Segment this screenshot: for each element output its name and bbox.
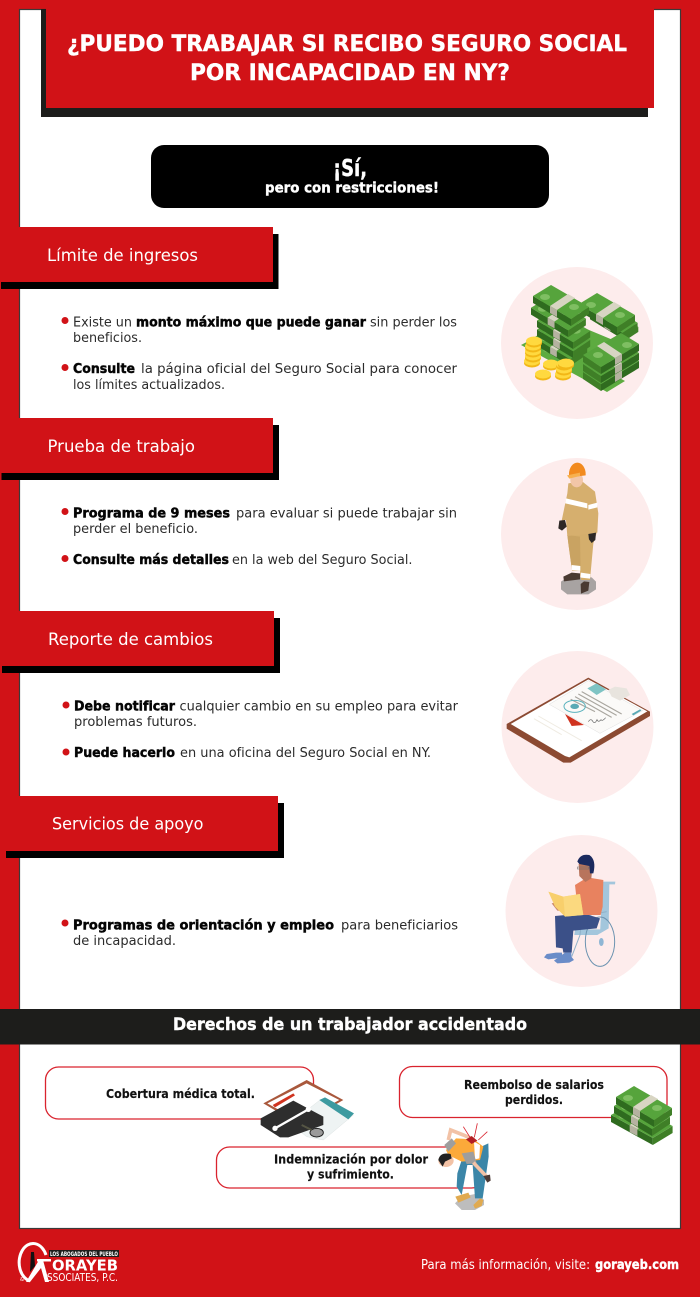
callout: Indemnización por dolor y sufrimiento: Indemnización por dolor	[274, 1152, 429, 1166]
logo: Gorayeb & Associates: &	[20, 1277, 24, 1283]
left stack	[534, 327, 587, 366]
text block: Límite de ingresos: Existe un	[73, 316, 132, 330]
text block: Prueba de trabajo: para evaluar si puede trabajar sin	[236, 506, 457, 522]
heading: Reporte de cambios	[2, 611, 280, 673]
logo: Gorayeb & Associates: LOS ABOGADOS DEL PUEBLO	[50, 1251, 118, 1258]
footer link text: Para más información, visite:	[421, 1258, 590, 1273]
icon: worker with back pain	[438, 1123, 491, 1210]
text block: Prueba de trabajo	[62, 506, 457, 568]
text block: Servicios de apoyo	[62, 918, 458, 949]
title text: ¿PUEDO TRABAJAR SI RECIBO SEGURO SOCIAL	[67, 32, 627, 57]
title banner	[41, 0, 654, 117]
callout: Reembolso de salarios perdidos: perdidos.	[505, 1092, 563, 1107]
heading: Servicios de apoyo	[6, 796, 284, 858]
text block: Reporte de cambios: problemas futuros.	[74, 715, 197, 730]
callout: Reembolso de salarios perdidos	[400, 1066, 673, 1145]
heading: Límite de ingresos	[0, 227, 278, 289]
text block: Reporte de cambios: Puede hacerlo	[74, 746, 175, 761]
callout: Cobertura médica total: Cobertura médica total.	[106, 1086, 255, 1101]
footer link text: gorayeb.com	[595, 1258, 679, 1273]
logo: Gorayeb & Associates	[19, 1243, 119, 1284]
icon: medical documents and x-ray	[261, 1080, 354, 1140]
answer pill: ¡Sí,	[333, 156, 367, 182]
callout: Indemnización por dolor y sufrimiento: y sufrimiento.	[307, 1166, 394, 1182]
text block: Prueba de trabajo: perder el beneficio.	[73, 522, 198, 537]
icon: money stack in circle	[501, 267, 653, 419]
back right bundle	[598, 311, 638, 341]
text block: Límite de ingresos: la página oficial del Seguro Social para conocer	[141, 362, 458, 377]
section bar: Derechos de un trabajador accidentado	[0, 1009, 700, 1044]
text block: Servicios de apoyo: Programas de orientación y empleo	[73, 918, 334, 934]
text block: Límite de ingresos: Consulte	[73, 362, 135, 377]
text block: Reporte de cambios	[62, 700, 459, 761]
text block: Límite de ingresos	[62, 316, 458, 393]
heading: Reporte de cambios: Reporte de cambios	[48, 630, 213, 650]
text block: Reporte de cambios: Debe notificar	[74, 700, 176, 714]
title text: POR INCAPACIDAD EN NY?	[190, 61, 510, 86]
text block: Prueba de trabajo: en la web del Seguro Social.	[232, 553, 412, 568]
callout: Indemnización por dolor y sufrimiento	[216, 1123, 491, 1210]
logo: Gorayeb & Associates: SSOCIATES, P.C.	[47, 1272, 118, 1284]
text block: Servicios de apoyo: para beneficiarios	[341, 918, 458, 934]
icon: person in wheelchair in circle	[506, 835, 658, 987]
heading: Servicios de apoyo: Servicios de apoyo	[52, 814, 204, 834]
text block: Reporte de cambios: en una oficina del Seguro Social en NY.	[180, 746, 431, 761]
text block: Reporte de cambios: cualquier cambio en su empleo para evitar	[180, 700, 459, 714]
heading: Prueba de trabajo	[1, 418, 279, 480]
flat bills	[521, 335, 625, 392]
callout: Reembolso de salarios perdidos: Reembolso de salarios	[464, 1077, 604, 1092]
icon: clipboard in circle	[502, 651, 654, 803]
callout: Cobertura médica total	[46, 1067, 354, 1140]
text block: Prueba de trabajo: Consulte más detalles	[73, 553, 229, 568]
front right stack	[583, 350, 639, 391]
icon: money bundles	[611, 1086, 673, 1145]
text block: Servicios de apoyo: de incapacidad.	[73, 934, 176, 949]
heading: Límite de ingresos: Límite de ingresos	[47, 246, 198, 266]
answer pill	[151, 145, 549, 208]
text block: Prueba de trabajo: Programa de 9 meses	[73, 506, 230, 522]
text block: Límite de ingresos: beneficios.	[73, 331, 142, 346]
section bar: Derechos de un trabajador accidentado: Derechos de un trabajador accidentado	[173, 1015, 527, 1034]
text block: Límite de ingresos: los límites actualizados.	[73, 378, 225, 393]
answer pill: pero con restricciones!	[265, 180, 439, 196]
text block: Límite de ingresos: monto máximo que puede ganar	[136, 316, 367, 330]
icon: worker in circle	[501, 458, 653, 610]
text block: Límite de ingresos: sin perder los	[370, 316, 457, 330]
coins	[524, 356, 540, 368]
logo: Gorayeb & Associates: ORAYEB	[52, 1256, 118, 1274]
title text	[67, 32, 627, 86]
heading: Prueba de trabajo: Prueba de trabajo	[48, 437, 195, 457]
